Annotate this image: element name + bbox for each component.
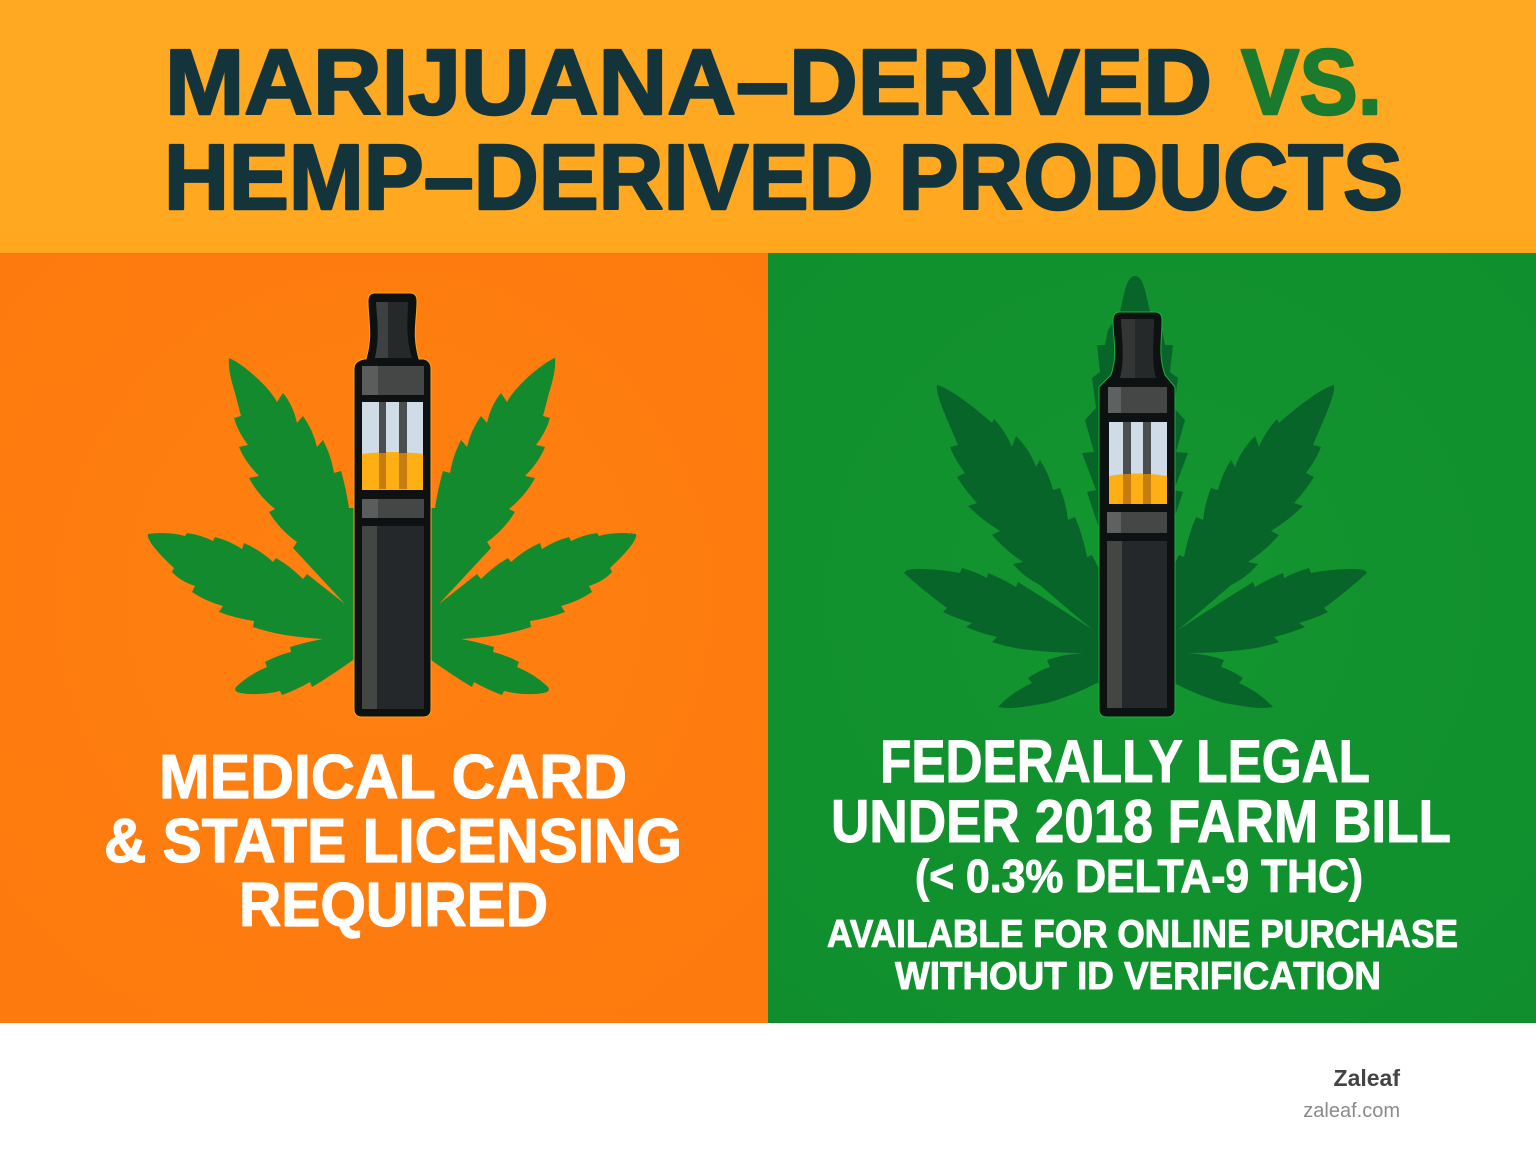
icon: vape pen: [1099, 312, 1175, 717]
text: legal status: UNDER 2018 FARM BILL: [831, 788, 1451, 855]
text: licensing requirement: [104, 743, 682, 940]
panel: hemp-derived: [768, 253, 1536, 1023]
title: [164, 30, 1403, 229]
footer: brand: Zaleaf: [1334, 1065, 1400, 1091]
icon: vape pen: [354, 293, 431, 717]
icon: cannabis leaf (dark): [904, 276, 1367, 708]
header banner: [0, 0, 1536, 253]
title: HEMP–DERIVED PRODUCTS: [164, 125, 1403, 229]
text: licensing requirement: & STATE LICENSING: [104, 807, 682, 876]
footer: brand: [1303, 1065, 1400, 1122]
title: MARIJUANA–DERIVED: [165, 30, 1212, 134]
text: legal status: FEDERALLY LEGAL: [880, 728, 1370, 795]
text: legal status: AVAILABLE FOR ONLINE PURCHASE: [827, 913, 1458, 956]
icon: cannabis leaf (bright): [148, 358, 636, 700]
text: legal status: WITHOUT ID VERIFICATION: [895, 955, 1381, 998]
text: legal status: [827, 728, 1458, 998]
footer: brand: zaleaf.com: [1303, 1100, 1400, 1122]
text: licensing requirement: MEDICAL CARD: [159, 743, 627, 812]
text: legal status: (< 0.3% DELTA-9 THC): [915, 850, 1363, 902]
text: licensing requirement: REQUIRED: [239, 871, 548, 940]
panel: marijuana-derived: [0, 253, 768, 1023]
title: VS.: [1241, 30, 1382, 134]
